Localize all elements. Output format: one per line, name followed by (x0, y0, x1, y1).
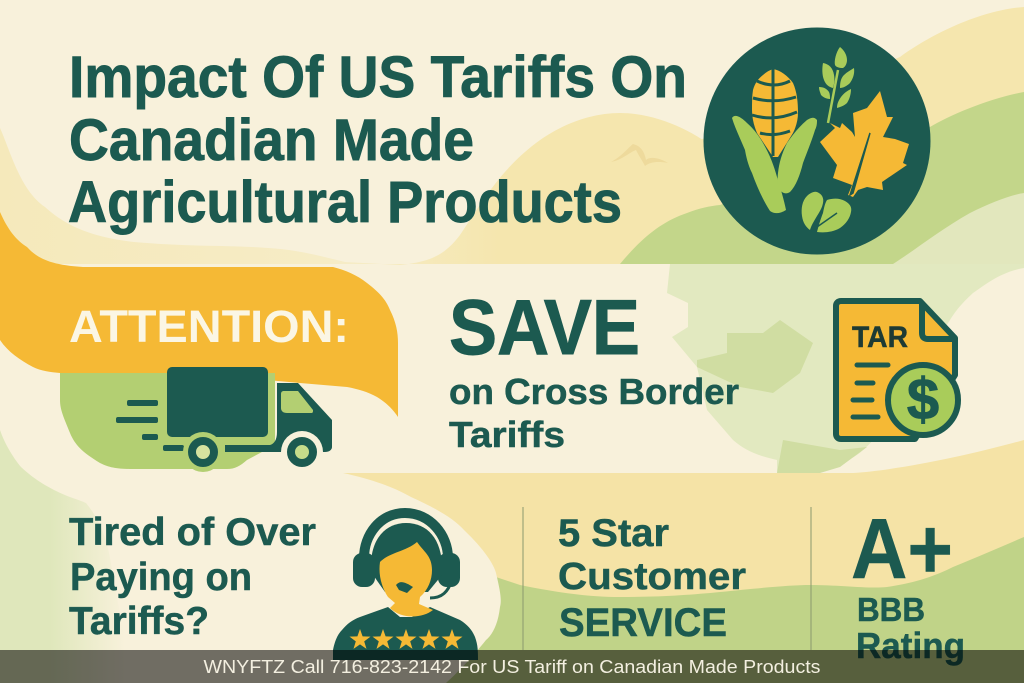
attention banner (0, 212, 398, 417)
text: tired of over paying: Tired of Over (69, 511, 316, 554)
title: Canadian Made (69, 108, 474, 173)
maple leaf (820, 91, 909, 197)
caption bar (0, 650, 1024, 683)
icon: delivery truck (60, 367, 332, 473)
icon: crops badge (704, 28, 930, 254)
text: 5 star customer service (558, 512, 746, 645)
icon: support agent (333, 513, 478, 660)
text: tired of over paying: Paying on (70, 556, 252, 599)
text: a+ rating: Rating (856, 625, 965, 666)
wheat sprig (819, 47, 854, 108)
save heading: SAVE (449, 283, 640, 371)
faint map of North America (697, 320, 867, 473)
title (68, 45, 687, 235)
text: 5 star customer service: Customer (558, 556, 746, 598)
save subheading: Tariffs (449, 414, 565, 455)
text: tired of over paying (69, 511, 316, 643)
icon: tariff document: $ (907, 367, 939, 432)
title: Agricultural Products (68, 170, 622, 235)
text: 5 star customer service: SERVICE (559, 601, 727, 645)
text: a+ rating (851, 502, 965, 666)
caption bar: WNYFTZ Call 716-823-2142 For US Tariff on Canadian Made Products (204, 657, 820, 677)
attention text: ATTENTION: (69, 301, 349, 352)
bird silhouettes (611, 144, 668, 166)
icon: tariff document: TAR (852, 321, 908, 354)
text: tired of over paying: Tariffs? (69, 600, 209, 643)
text: a+ rating: A+ (851, 502, 953, 597)
corn husks (732, 116, 786, 213)
small leaves (802, 192, 823, 230)
corn cob (752, 69, 798, 157)
text: 5 star customer service: 5 Star (558, 512, 669, 555)
save subheading (449, 371, 739, 455)
text: a+ rating: BBB (857, 591, 925, 628)
icon: tariff document (836, 301, 958, 439)
save subheading: on Cross Border (449, 371, 739, 412)
title: Impact Of US Tariffs On (69, 45, 687, 110)
